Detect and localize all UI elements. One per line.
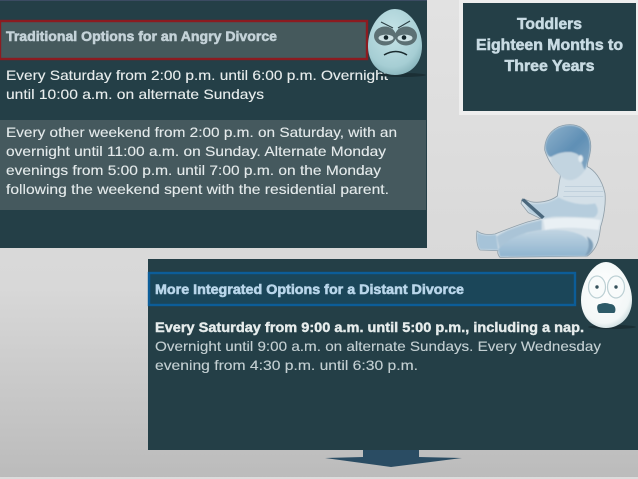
heading box: integrated options — [149, 273, 575, 305]
text block: first traditional option: until 10:00 a.m. on alternate Sundays — [6, 86, 264, 102]
icon: shocked egg face — [581, 262, 636, 329]
text block: second traditional option — [6, 124, 397, 197]
panel: traditional options for an angry divorce — [0, 0, 427, 248]
icon: angry egg face — [368, 9, 426, 77]
text block: first traditional option: Every Saturday from 2:00 p.m. until 6:00 p.m. Overnight — [6, 67, 388, 83]
heading box: traditional options: Traditional Options for an Angry Divorce — [6, 29, 277, 44]
text block: first traditional option — [6, 67, 388, 102]
text block: integrated option schedule: Every Saturday from 9:00 a.m. until 5:00 p.m., including a nap. — [155, 319, 584, 335]
text block: second traditional option: evenings from 5:00 p.m. until 7:00 p.m. on the Monday — [6, 162, 381, 178]
arrow: continues to next page — [325, 450, 462, 467]
text block: integrated option schedule: evening from 4:30 p.m. until 6:30 p.m. — [155, 357, 418, 373]
text block: integrated option schedule: Overnight until 9:00 a.m. on alternate Sundays. Every Wednesday — [155, 338, 601, 354]
panel: more integrated options for a distant divorce — [148, 259, 638, 450]
title: toddlers age range: Toddlers — [517, 16, 582, 33]
heading box: traditional options — [0, 21, 367, 59]
text block: integrated option schedule — [155, 319, 601, 373]
title: toddlers age range: Eighteen Months to — [476, 37, 623, 54]
panel: toddlers title card — [459, 0, 638, 115]
text block: second traditional option: following the weekend spent with the residential parent. — [6, 181, 389, 197]
illustration: toddler sitting with a phone — [477, 125, 605, 257]
text block: second traditional option: Every other weekend from 2:00 p.m. on Saturday, with an — [6, 124, 397, 140]
heading box: integrated options: More Integrated Options for a Distant Divorce — [155, 282, 465, 297]
band: second option background — [0, 120, 426, 210]
text block: second traditional option: overnight until 11:00 a.m. on Sunday. Alternate Monday — [6, 143, 386, 159]
title: toddlers age range: Three Years — [504, 58, 594, 75]
title: toddlers age range — [476, 16, 623, 75]
